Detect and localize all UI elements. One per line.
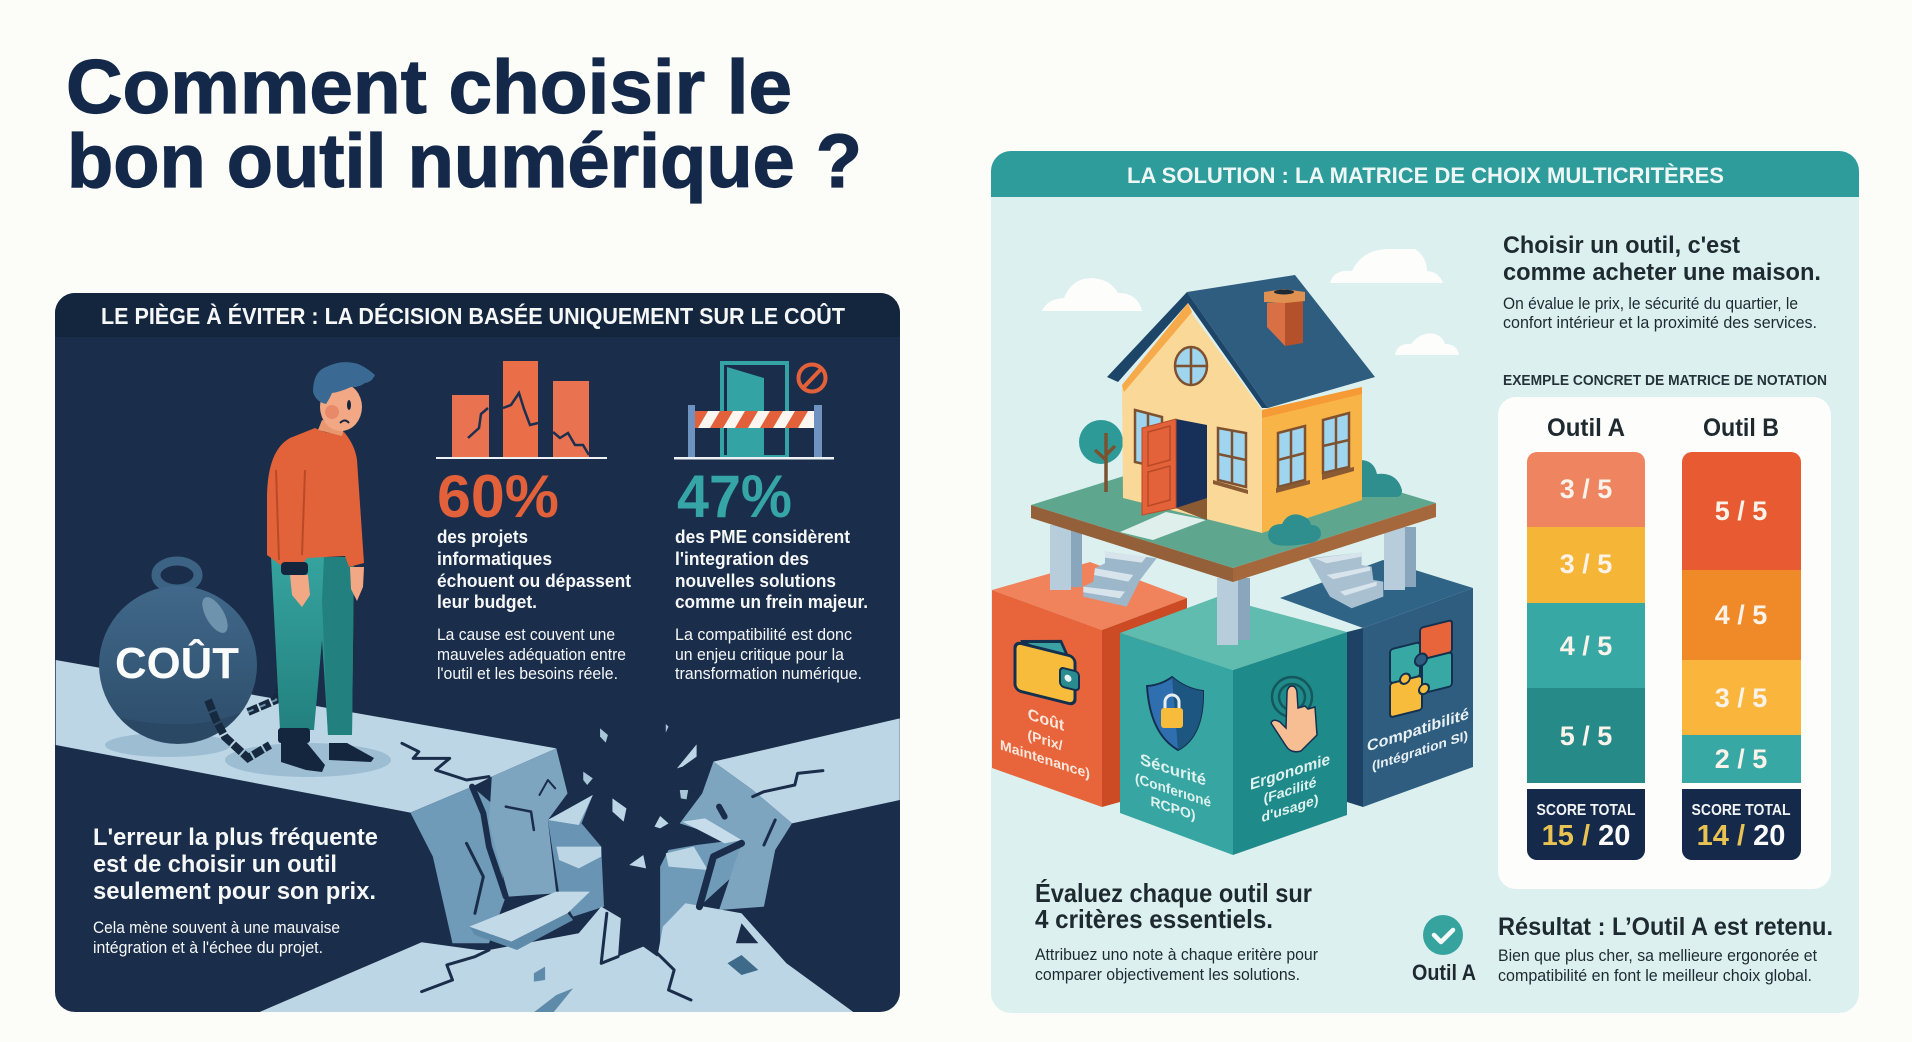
text block: most frequent error: est de choisir un outil: [93, 851, 337, 878]
cube: compatibility: [1280, 560, 1473, 807]
cube: cost: Coût: [1028, 705, 1065, 735]
column: tool A: SCORE TOTAL: [1536, 802, 1636, 819]
cube: compatibility: (Intégration SI): [1372, 728, 1468, 774]
windows: [1135, 347, 1349, 487]
text block: tool is like buying a house: [1503, 232, 1821, 332]
panel: the solution: [991, 151, 1859, 1013]
stat: 60 percent: leur budget.: [437, 592, 537, 612]
house walls and roof: [1107, 275, 1375, 546]
rock fragments: [583, 724, 697, 868]
icon: shield with padlock: [1147, 677, 1203, 750]
stat: 60 percent: informatiques: [437, 549, 552, 569]
stat: 60 percent: La cause est couvent une: [437, 625, 615, 644]
text block: evaluate on 4 criteria: Évaluez chaque outil sur: [1035, 878, 1312, 908]
title: Comment choisir le: [66, 45, 792, 130]
icon: ball and chain labelled cost: COÛT: [115, 637, 239, 688]
icon: puzzle: [1390, 620, 1452, 718]
panel: trap to avoid: [55, 293, 900, 1012]
column: tool B: 4 / 5: [1715, 600, 1767, 630]
column: tool B: SCORE TOTAL: [1692, 802, 1790, 819]
cube: cost: Maintenance): [1000, 738, 1090, 783]
column: tool B: Outil B: [1703, 414, 1779, 442]
stat: 47 percent: [675, 463, 868, 683]
cube: cost: [992, 562, 1187, 807]
text block: result: [1498, 913, 1833, 985]
column: tool A: 4 / 5: [1560, 631, 1612, 661]
column: tool B: 3 / 5: [1715, 683, 1767, 713]
stat: 47 percent: transformation numérique.: [675, 664, 862, 683]
chimney: [1264, 289, 1305, 346]
column: tool A: 3 / 5: [1560, 474, 1612, 504]
column: tool A: 3 / 5: [1560, 549, 1612, 579]
stat: 47 percent: l'integration des: [675, 549, 809, 569]
stat: 60 percent: des projets: [437, 527, 528, 547]
text block: most frequent error: [93, 824, 378, 957]
title: bon outil numérique ?: [67, 119, 862, 204]
cube: security and ergonomics: (Conferıoné: [1135, 771, 1211, 811]
panel header: solution: LA SOLUTION : LA MATRICE DE CHOIX MULTICRITÈRES: [1127, 163, 1724, 188]
panel header: solution: [991, 151, 1859, 197]
icon: pointing hand: [1271, 677, 1317, 752]
stat: 60 percent: échouent ou dépassent: [437, 571, 631, 591]
stat: 47 percent: 47%: [677, 463, 792, 530]
stat: 47 percent: un enjeu critique pour la: [675, 645, 844, 664]
illustration: sad man chained to a weight: [99, 362, 391, 777]
column: tool B: 14 / 20: [1697, 820, 1785, 852]
title: [66, 45, 862, 204]
stat: 47 percent: nouvelles solutions: [675, 571, 836, 591]
text block: tool is like buying a house: On évalue le prix, le sécurité du quartier, le: [1503, 294, 1798, 313]
side pillars: [1050, 525, 1416, 590]
text block: most frequent error: intégration et à l'échee du projet.: [93, 938, 323, 957]
column: tool A: 15 / 20: [1542, 820, 1630, 852]
stat: 60 percent: [437, 463, 631, 683]
column: tool A: Outil A: [1547, 414, 1625, 442]
text block: result: compatibilité en font le meilleur choix global.: [1498, 966, 1812, 985]
scoring matrix card: [1498, 397, 1831, 889]
panel header: trap: [55, 293, 900, 337]
column: tool B: [1682, 414, 1801, 860]
cube: compatibility: Compatibilité: [1367, 706, 1469, 755]
cube: security and ergonomics: (Facilité: [1264, 775, 1316, 807]
text block: result: Bien que plus cher, sa mellieure ergonorée et: [1498, 946, 1817, 965]
stat: 60 percent: l'outil et les besoins réele.: [437, 664, 618, 683]
icon: winner check mark: Outil A: [1412, 960, 1476, 985]
stairs: [1083, 552, 1383, 608]
heading: scoring matrix: EXEMPLE CONCRET DE MATRICE DE NOTATION: [1503, 373, 1827, 389]
icon: blocked door: [674, 363, 834, 460]
icon: cracked bars: [436, 361, 607, 459]
text block: tool is like buying a house: Choisir un outil, c'est: [1503, 232, 1740, 259]
text block: evaluate on 4 criteria: Attribuez uno note à chaque eritère pour: [1035, 945, 1318, 964]
icon: winner check mark: [1412, 915, 1476, 985]
text block: most frequent error: seulement pour son prix.: [93, 878, 376, 905]
text block: evaluate on 4 criteria: 4 critères essentiels.: [1035, 904, 1273, 934]
cube: security and ergonomics: Sécurité: [1140, 751, 1206, 790]
stat: 47 percent: comme un frein majeur.: [675, 592, 868, 612]
column: tool B: 2 / 5: [1715, 744, 1767, 774]
platform: [1031, 442, 1436, 582]
cube: cost: (Prix/: [1027, 728, 1063, 755]
text block: tool is like buying a house: comme acheter une maison.: [1503, 259, 1821, 286]
cube: security and ergonomics: [1120, 597, 1347, 855]
icon: wallet: [1015, 630, 1079, 706]
illustration: cracked cliff: [56, 660, 900, 1012]
column: tool B: 5 / 5: [1715, 496, 1767, 526]
illustration: house on four pillars: [992, 275, 1473, 855]
icon: ball and chain labelled cost: [99, 561, 257, 744]
column: tool A: [1527, 414, 1645, 860]
text block: result: Résultat : L’Outil A est retenu.: [1498, 913, 1833, 941]
text block: most frequent error: Cela mène souvent à une mauvaise: [93, 918, 340, 937]
column: tool A: 5 / 5: [1560, 721, 1612, 751]
cube: security and ergonomics: d'usage): [1262, 792, 1319, 826]
stat: 60 percent: mauveles adéquation entre: [437, 645, 626, 664]
illustration: clouds: [1042, 249, 1459, 355]
panel header: trap: LE PIÈGE À ÉVITER : LA DÉCISION BASÉE UNIQUEMENT SUR LE COÛT: [101, 302, 845, 329]
cube: security and ergonomics: RCPO): [1150, 794, 1196, 824]
centre pillar: [1217, 578, 1250, 645]
stat: 60 percent: 60%: [437, 463, 559, 530]
stat: 47 percent: La compatibilité est donc: [675, 625, 852, 644]
text block: tool is like buying a house: confort intérieur et la proximité des services.: [1503, 313, 1817, 332]
text block: evaluate on 4 criteria: comparer objectivement les solutions.: [1035, 965, 1300, 984]
text block: evaluate on 4 criteria: [1035, 878, 1318, 984]
cube: security and ergonomics: Ergonomie: [1250, 750, 1330, 794]
left and right cliff tops use zoom-space coordinates: [56, 660, 556, 813]
tree and bushes: [1079, 420, 1402, 497]
text block: most frequent error: L'erreur la plus fréquente: [93, 824, 378, 851]
stat: 47 percent: des PME considèrent: [675, 527, 850, 547]
